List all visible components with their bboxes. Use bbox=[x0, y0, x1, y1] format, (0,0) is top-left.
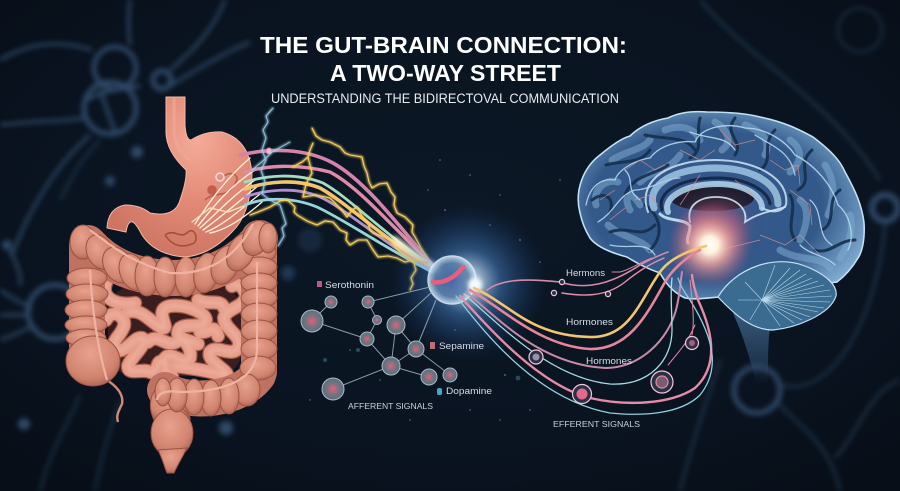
hormones label 1: Hormones bbox=[566, 317, 614, 327]
stomach lining detail bbox=[165, 173, 237, 246]
light gyri highlights bbox=[586, 126, 851, 265]
large intestine bbox=[65, 217, 277, 473]
small intestine bbox=[105, 283, 246, 376]
title bbox=[260, 32, 627, 86]
coloured arcs bbox=[240, 150, 430, 262]
subtitle: UNDERSTANDING THE BIDIRECTOVAL COMMUNICATION bbox=[271, 91, 619, 106]
afferent signals label: AFFERENT SIGNALS bbox=[348, 401, 433, 411]
star dust bbox=[309, 159, 561, 421]
hormones label 2: Hormones bbox=[586, 356, 633, 366]
cerebellum bbox=[718, 262, 836, 330]
stomach bbox=[107, 97, 252, 257]
brain bbox=[578, 112, 864, 385]
serothonin label: Serothonin bbox=[325, 280, 374, 291]
efferent signals label: EFFERENT SIGNALS bbox=[553, 419, 640, 429]
vessel traces bbox=[600, 130, 820, 255]
colon base bbox=[87, 238, 260, 398]
appendix bbox=[107, 380, 122, 422]
light beam into orb bbox=[395, 240, 438, 270]
top pink signal node bbox=[266, 148, 272, 154]
network edges bbox=[312, 287, 450, 389]
yellow lightning bbox=[250, 128, 427, 290]
afferent signal bundle bbox=[192, 108, 438, 290]
dark gyri sulci bbox=[592, 118, 855, 251]
efferent signal bundle bbox=[456, 246, 712, 414]
esophagus shading bbox=[174, 97, 190, 160]
microbe in orb bbox=[433, 267, 463, 282]
colon bands bbox=[90, 224, 257, 400]
dopamine label: Dopamine bbox=[446, 386, 492, 397]
title: THE GUT-BRAIN CONNECTION: bbox=[260, 32, 627, 58]
blue lightning bbox=[252, 108, 290, 246]
brain glow core bbox=[668, 203, 752, 287]
bundle from stomach fan bbox=[192, 158, 262, 233]
molecule network bbox=[301, 280, 492, 400]
lighter gyri bbox=[595, 122, 851, 268]
gut illustration bbox=[65, 97, 277, 473]
central orb bbox=[390, 204, 546, 360]
title: A TWO-WAY STREET bbox=[330, 60, 561, 86]
brain stem bbox=[733, 313, 770, 385]
limbic arcs bbox=[646, 160, 786, 250]
hermons label: Hermons bbox=[566, 268, 606, 278]
sepamine label: Sepamine bbox=[439, 341, 484, 352]
signal nodes bbox=[529, 279, 698, 404]
cerebrum silhouette bbox=[578, 112, 864, 299]
molecule nodes bbox=[301, 296, 457, 400]
